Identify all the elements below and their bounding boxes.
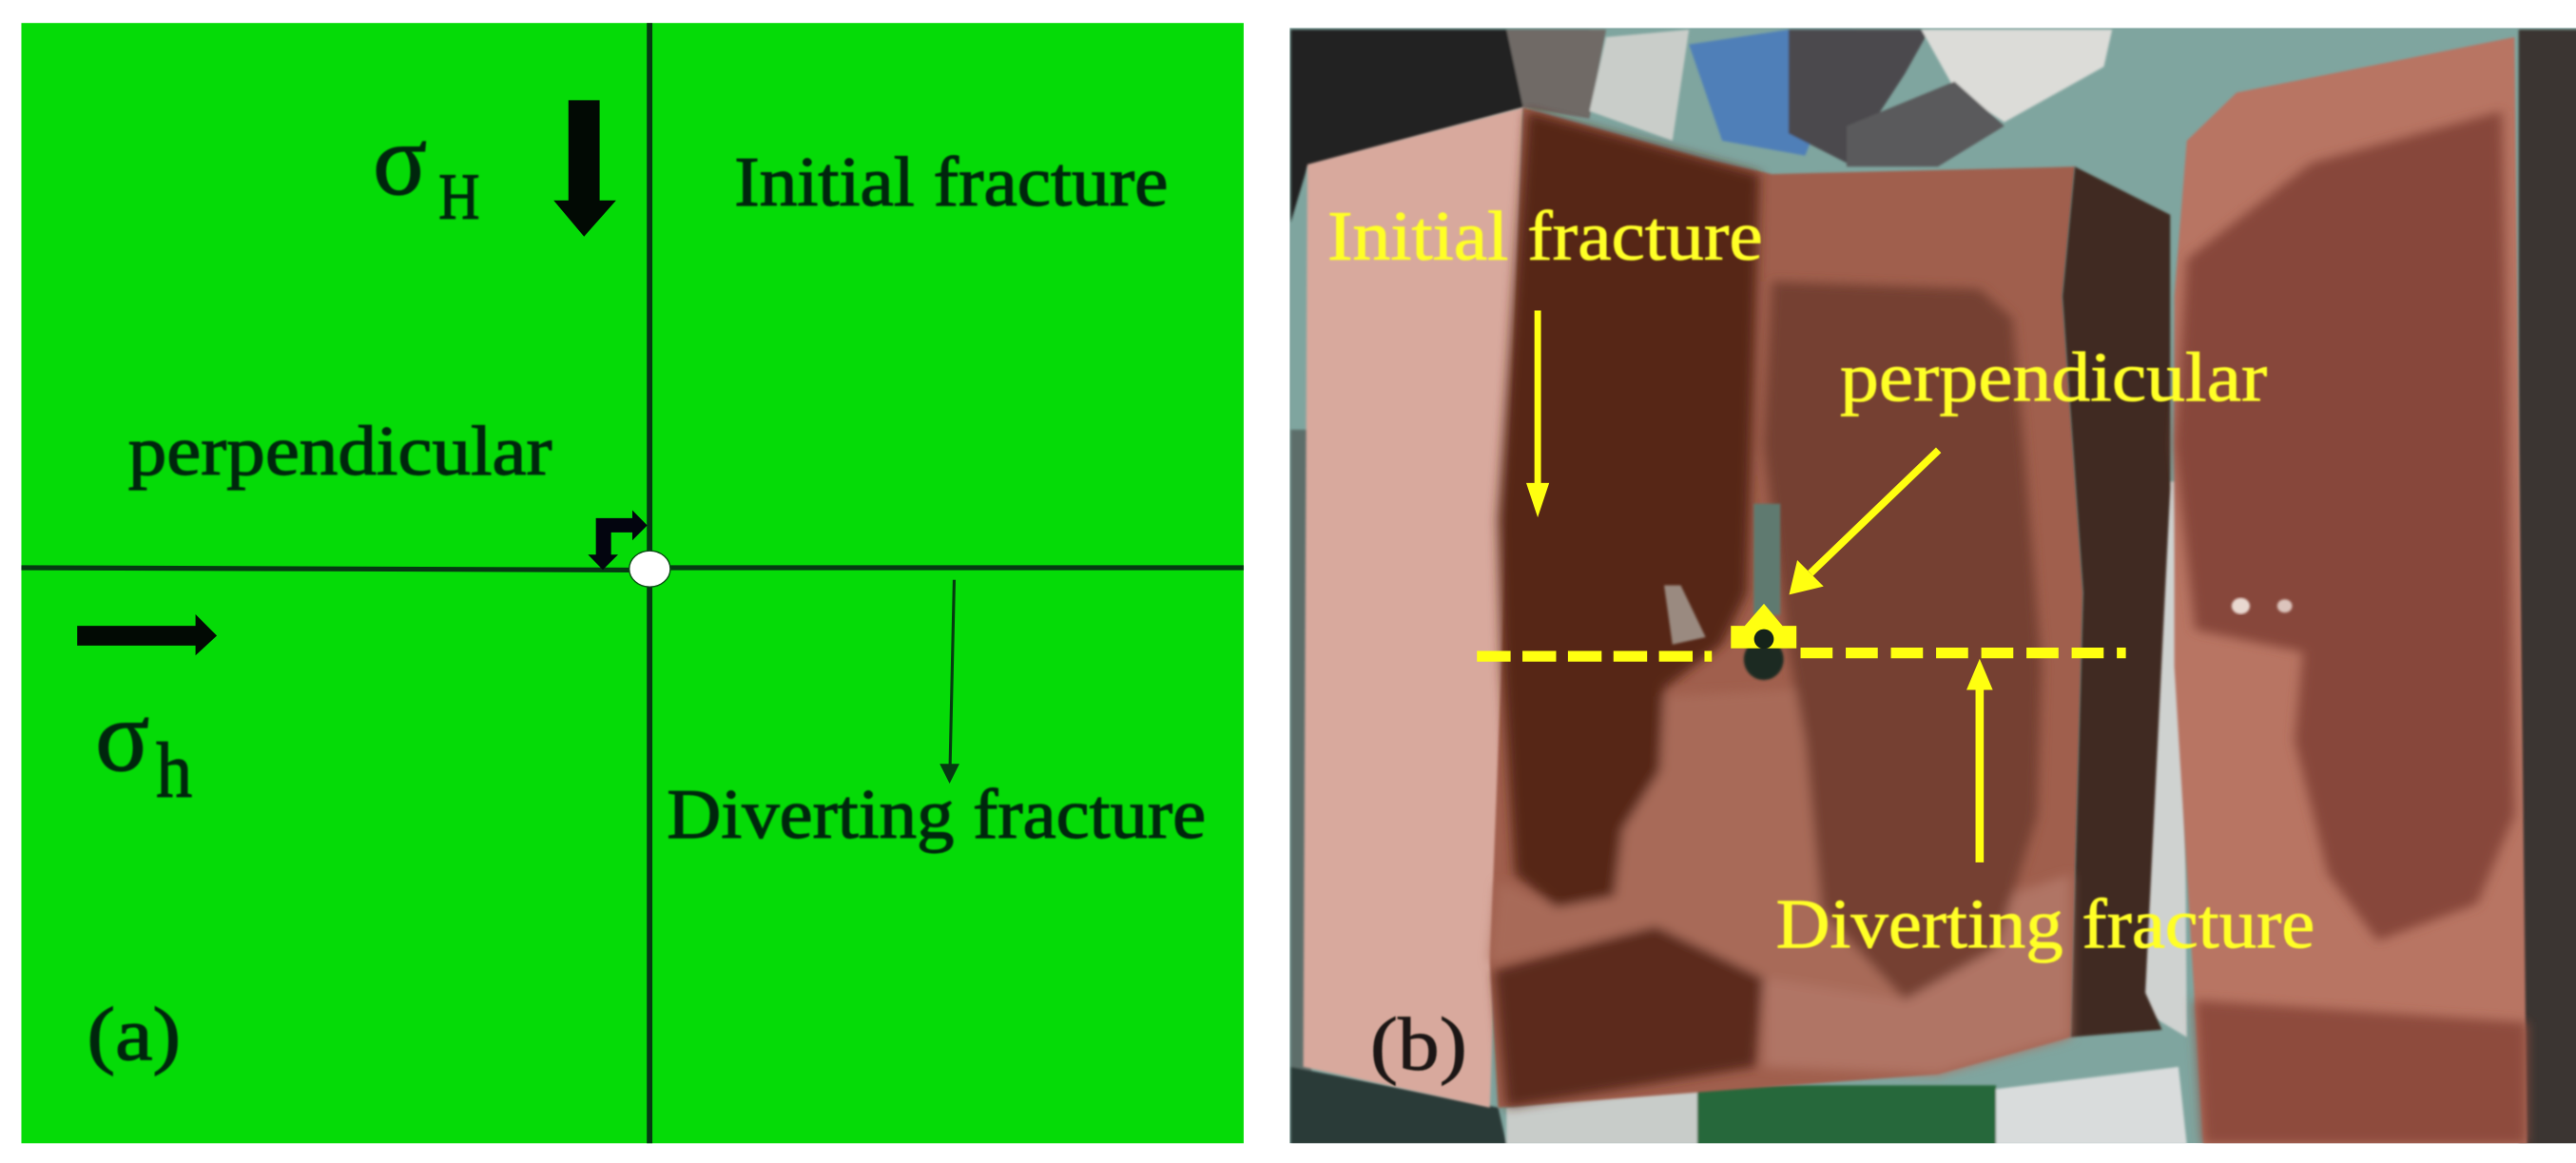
- yellow arrow: initial fracture: [1526, 310, 1549, 517]
- borehole slot: [1664, 504, 1784, 680]
- label: panel a: (a): [87, 993, 181, 1076]
- label: diverting fracture: Diverting fracture: [1776, 886, 2315, 964]
- green background: [21, 23, 1244, 1143]
- photo labels: [1327, 198, 2315, 964]
- diverting fracture horizontal line: [21, 568, 1244, 570]
- surroundings: [1290, 29, 2576, 1149]
- label: sigma H: H: [438, 160, 479, 233]
- initial fracture vertical line: [647, 23, 652, 1143]
- label: sigma H: σ: [373, 105, 427, 217]
- yellow arrow: diverting fracture: [1966, 659, 1993, 863]
- photo backdrop: [1289, 28, 2576, 1143]
- right block half: [2175, 37, 2527, 1145]
- label: initial fracture: Initial fracture: [1327, 198, 1763, 276]
- panel b: fractured rock photo: [1289, 28, 2576, 1149]
- panel a: fracture schematic: [21, 23, 1244, 1143]
- label: sigma h: h: [156, 727, 192, 814]
- label: panel b: (b): [1370, 1003, 1467, 1087]
- minimum stress arrow: [77, 614, 217, 655]
- left light face of block: [1304, 107, 1523, 1108]
- yellow arrow: perpendicular: [1789, 450, 1939, 594]
- yellow perpendicular marker: [1731, 604, 1796, 649]
- photo contents drawn in local coordinates: [1290, 29, 2576, 1149]
- maximum stress arrow: [553, 100, 616, 237]
- perpendicular elbow arrow: [588, 511, 648, 570]
- label: perpendicular: perpendicular: [128, 413, 552, 491]
- diverting fracture pointer arrow: [939, 580, 959, 784]
- wellbore circle: [629, 551, 670, 587]
- labels: [87, 105, 1206, 1076]
- label: perpendicular: perpendicular: [1840, 339, 2267, 417]
- dashed diverting fracture trace: [1477, 653, 2126, 656]
- label: diverting fracture: Diverting fracture: [667, 776, 1206, 854]
- stains on right block: [2175, 111, 2527, 1145]
- water stains on main face: [1490, 111, 2071, 1108]
- label: initial fracture: Initial fracture: [734, 144, 1168, 222]
- label: sigma h: σ: [95, 681, 149, 793]
- pale specks on right block: [2232, 598, 2293, 614]
- main fracture face: [1490, 107, 2083, 1108]
- right shadow side: [2063, 166, 2170, 1037]
